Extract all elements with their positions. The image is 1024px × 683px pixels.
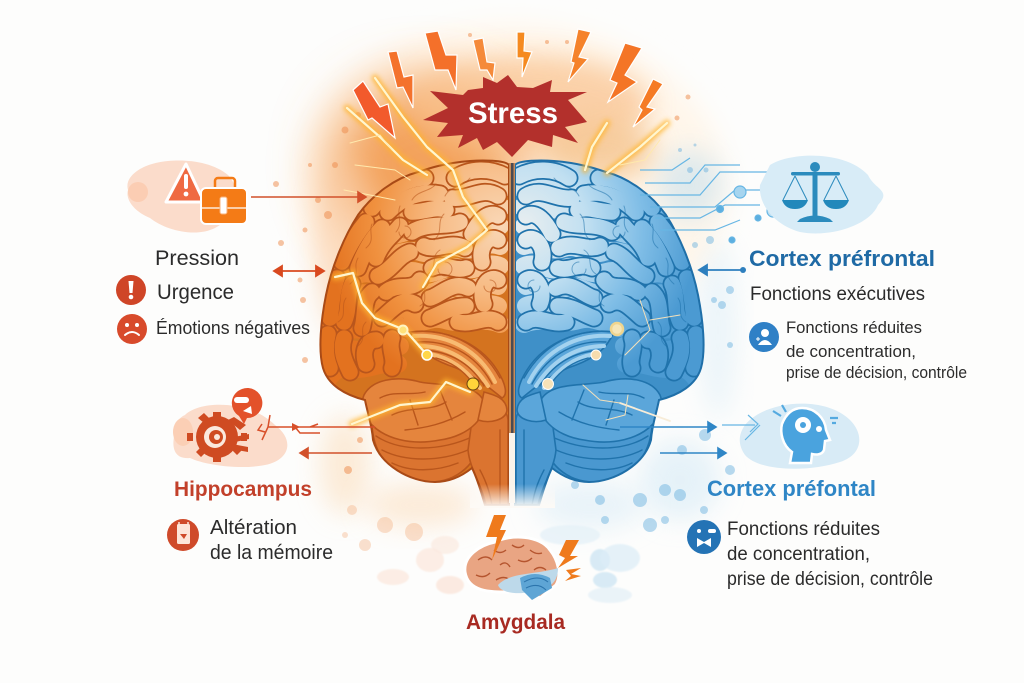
icon: urgence: [116, 275, 146, 305]
text: urgence: Urgence: [157, 281, 234, 304]
icon: memory notebook: [167, 519, 199, 551]
icon: person: [749, 322, 779, 352]
icon: circuit lines: [640, 158, 779, 243]
arrow: pression to brain: [251, 192, 366, 202]
panel: hippocampus: [167, 388, 375, 564]
icon: balance scale: [760, 156, 883, 233]
dot: [740, 267, 746, 273]
icon: head with gear: [722, 404, 859, 469]
node on arrow: [292, 423, 300, 431]
panel: amygdala: [377, 515, 640, 634]
icon: brain silhouette with warning and briefcase: [127, 161, 247, 233]
text: fonctions reduites bottom: prise de décision, contrôle: [727, 569, 933, 590]
lightning cracks over left hemisphere: [335, 78, 680, 424]
speckles: [273, 33, 735, 551]
brain: right calm hemisphere: [515, 160, 704, 505]
brain: left stressed hemisphere: [320, 160, 509, 505]
icon: bolts around brain: [486, 515, 581, 581]
text: alteration: Altération: [210, 517, 297, 539]
text: alteration: de la mémoire: [210, 542, 333, 564]
central fissure: [470, 163, 555, 508]
panel: cortex prefontal bottom: [620, 404, 933, 590]
text: fonctions reduites: [786, 318, 967, 382]
icon: sad face: [117, 314, 147, 344]
text: fonctions reduites: prise de décision, contrôle: [786, 363, 967, 382]
text: fonctions executives: Fonctions exécutives: [750, 284, 925, 305]
text: fonctions reduites bottom: [727, 519, 933, 590]
double arrow: [274, 266, 324, 276]
text: fonctions reduites bottom: de concentration,: [727, 544, 870, 565]
text: alteration: [210, 517, 333, 564]
nodes on tracts: [398, 323, 623, 390]
text: fonctions reduites: Fonctions réduites: [786, 318, 922, 337]
stress burst: [423, 75, 587, 157]
arrow: to head bottom: [660, 448, 726, 458]
splash behind amygdala: [377, 525, 640, 603]
heading: pression: Pression: [155, 247, 239, 270]
heading: hippocampus: Hippocampus: [174, 478, 312, 501]
icon: connection: [687, 520, 721, 554]
background splash: orange stress and blue calm: [297, 25, 736, 530]
text: emotions: Émotions négatives: [156, 317, 310, 338]
heading: cortex prefontal: Cortex préfontal: [707, 476, 876, 501]
arrow: to head top: [620, 422, 716, 432]
stress bolts: [353, 29, 663, 138]
panel: cortex prefrontal top: [640, 156, 967, 382]
text: fonctions reduites bottom: Fonctions réduites: [727, 519, 880, 540]
arrow: to brain: [699, 265, 743, 275]
text: fonctions reduites: de concentration,: [786, 342, 916, 361]
arrow: hippocampus branched line: [258, 415, 375, 440]
panel: pression: [116, 161, 366, 344]
stress burst: Stress: [468, 97, 558, 130]
text: amygdala: Amygdala: [466, 611, 565, 634]
heading: cortex prefrontal: Cortex préfrontal: [749, 246, 935, 271]
arrow: to hippocampus: [300, 448, 372, 458]
icon: brain with gear and speech bubble: [173, 388, 287, 467]
icon: small brain: [465, 537, 559, 600]
